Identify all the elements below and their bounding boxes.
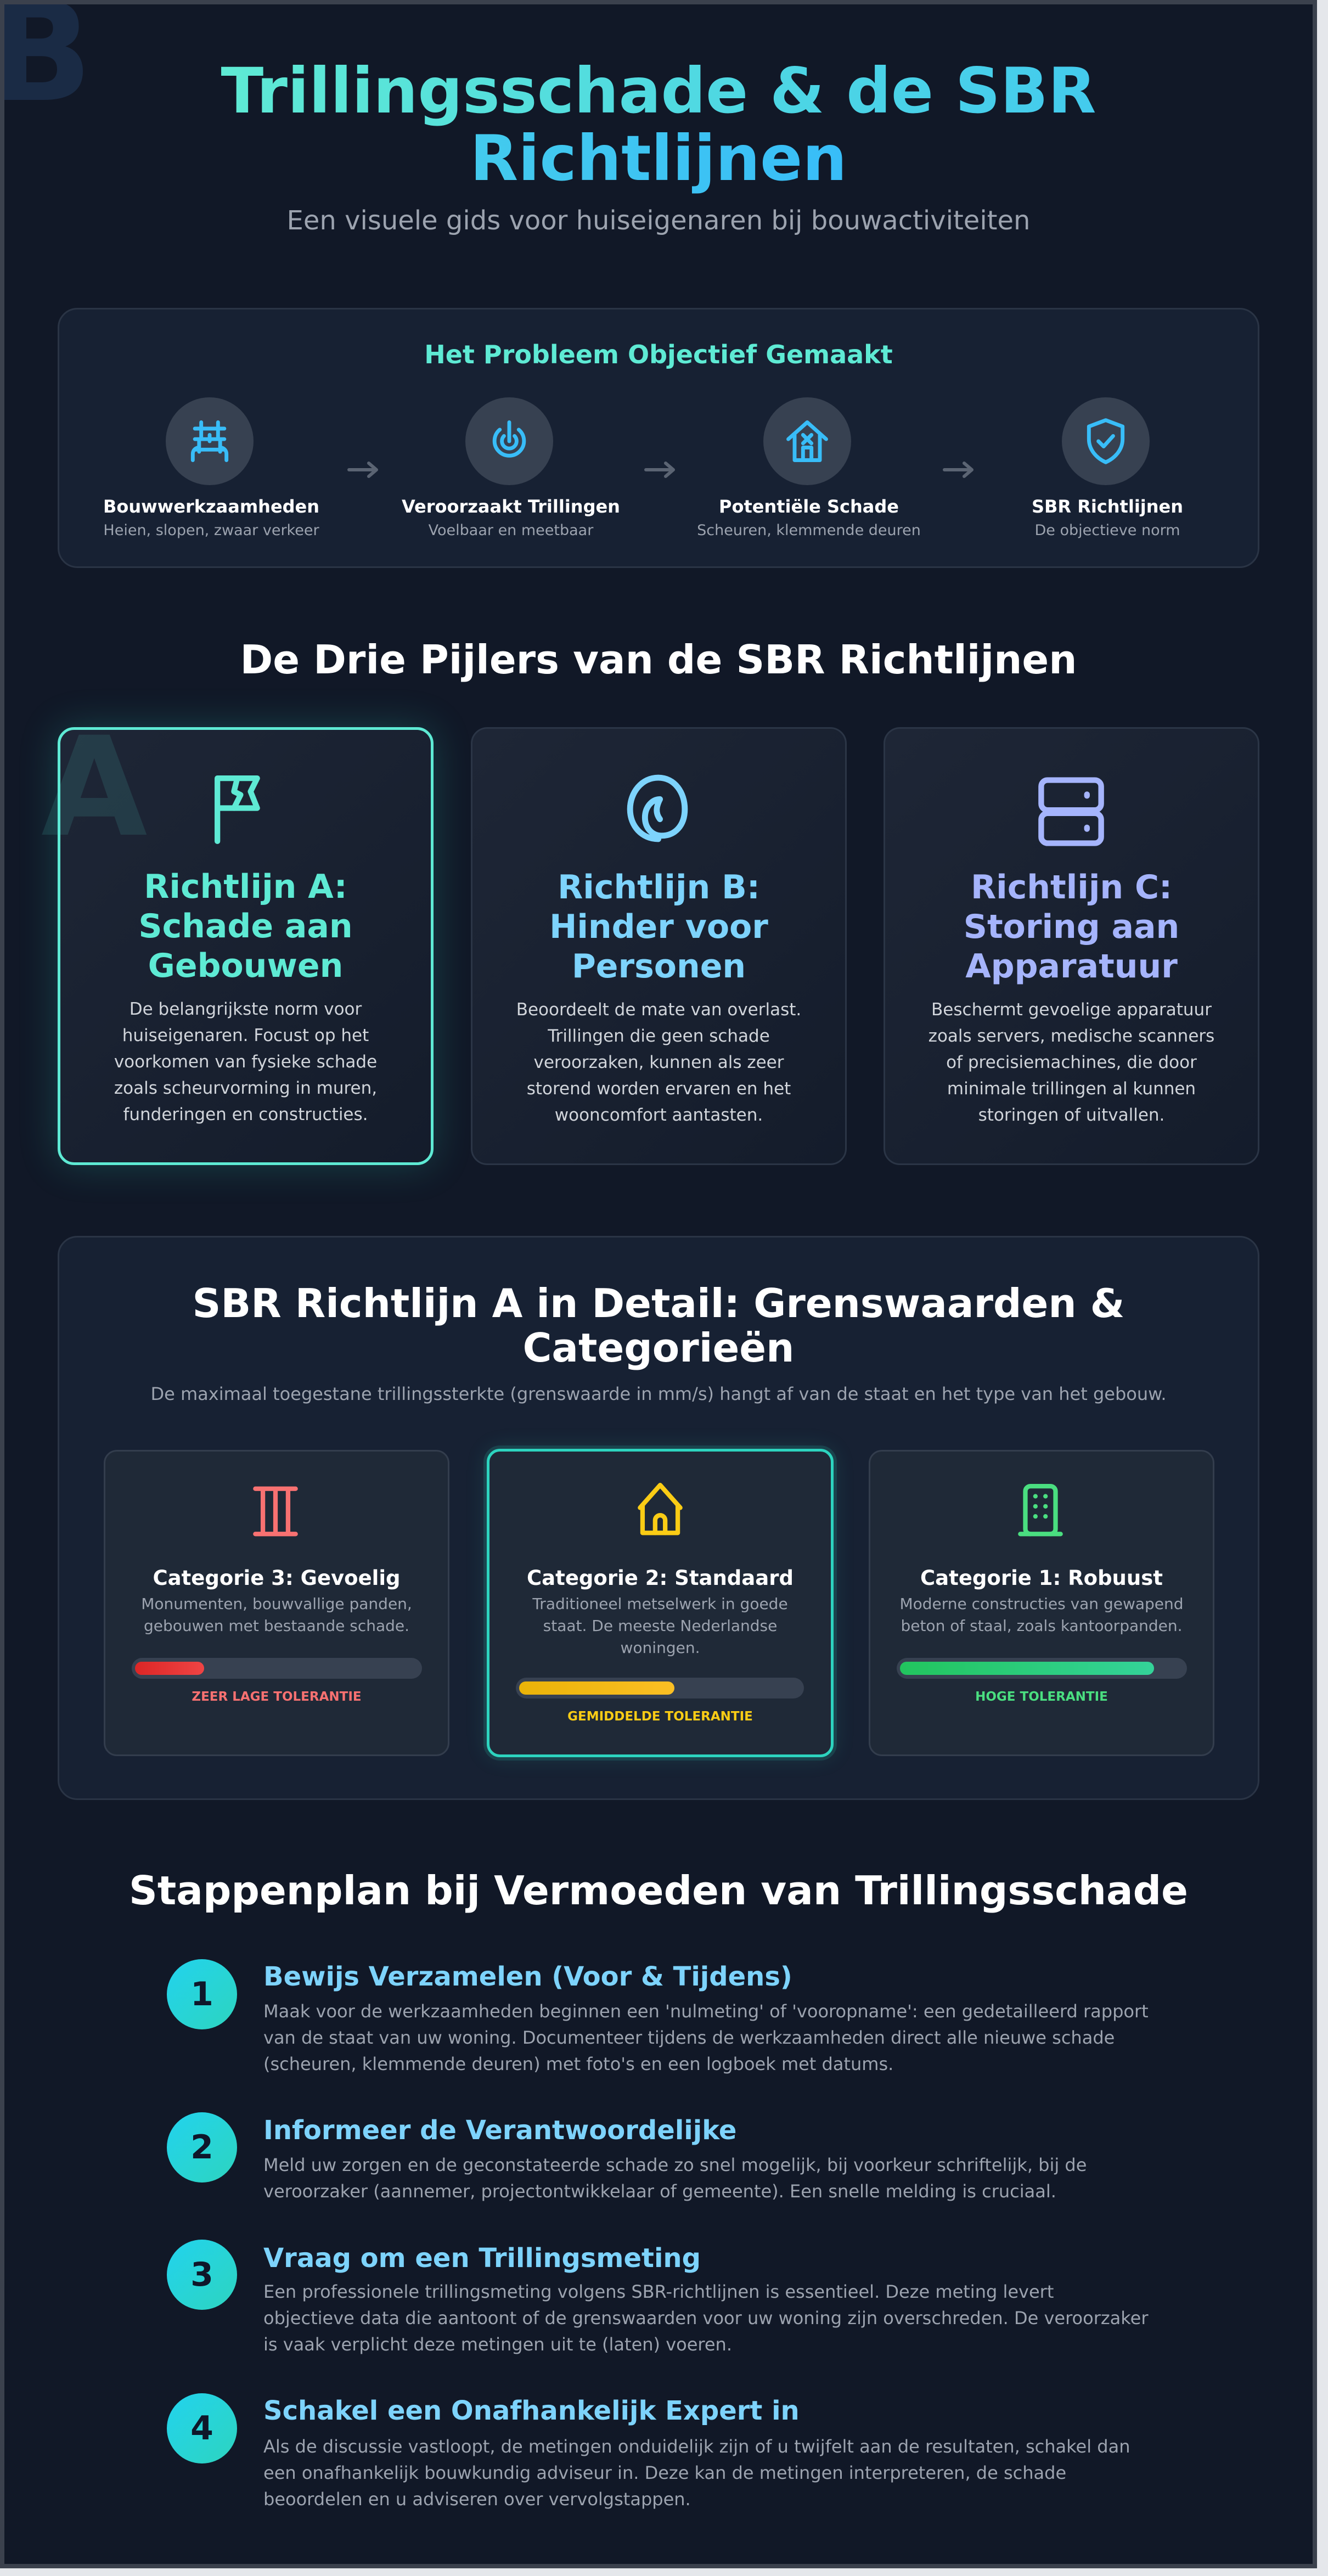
label: Scheuren, klemmende deuren [697, 522, 921, 539]
description: funderingen en constructies. [123, 1105, 368, 1124]
step body: een onafhankelijk bouwkundig adviseur in. Deze kan de metingen interpreteren, de schade [263, 2462, 1066, 2483]
label: Bouwwerkzaamheden [103, 496, 319, 517]
title: Richtlijn C: [971, 868, 1172, 907]
label [402, 496, 620, 539]
title [138, 868, 353, 985]
label [103, 496, 319, 539]
panel heading: Het Probleem Objectief Gemaakt [424, 340, 893, 369]
label: SBR Richtlijnen [1032, 496, 1183, 517]
icon: power [465, 397, 553, 485]
icon: house [630, 1480, 690, 1540]
title: Apparatuur [965, 947, 1178, 986]
description [114, 999, 377, 1124]
bar: hoge tolerantie [897, 1658, 1187, 1679]
heading [193, 1280, 1124, 1371]
title: Schade aan [138, 907, 353, 946]
icon: building [1010, 1481, 1071, 1542]
title [549, 868, 768, 986]
step 2 [167, 2108, 1166, 2207]
step body: is vaak verplicht deze metingen uit te (laten) voeren. [263, 2334, 732, 2355]
step 4 [167, 2389, 1166, 2512]
description: storingen of uitvallen. [978, 1105, 1164, 1125]
icon: house with crack [763, 397, 851, 485]
step body: (scheuren, klemmende deuren) met foto's en een logboek met datums. [263, 2054, 893, 2074]
number circle [167, 2393, 237, 2463]
heading: SBR Richtlijn A in Detail: Grenswaarden & [193, 1280, 1124, 1326]
description: Traditioneel metselwerk in goede [532, 1595, 788, 1613]
description: of precisiemachines, die door [946, 1053, 1197, 1072]
description: Moderne constructies van gewapend [899, 1595, 1184, 1613]
step body: Een professionele trillingsmeting volgens SBR-richtlijnen is essentieel. Deze meting levert [263, 2281, 1054, 2302]
description: Beschermt gevoelige apparatuur [931, 1000, 1212, 1020]
description: voorkomen van fysieke schade [114, 1052, 377, 1072]
title: Richtlijnen [470, 122, 847, 195]
arrow [347, 462, 378, 478]
number circle: 4 [190, 2409, 213, 2448]
step 1 [167, 1955, 1166, 2076]
title: Richtlijn A: [144, 868, 347, 906]
number circle: 2 [190, 2128, 213, 2167]
number circle [167, 2240, 237, 2310]
description: storend worden ervaren en het [527, 1079, 791, 1099]
title: Hinder voor [549, 908, 768, 946]
subtitle: Een visuele gids voor huiseigenaren bij bouwactiviteiten [287, 205, 1030, 236]
description: gebouwen met bestaande schade. [144, 1617, 409, 1635]
title: Categorie 2: Standaard [527, 1566, 794, 1590]
label: Heien, slopen, zwaar verkeer [103, 522, 319, 539]
title [964, 868, 1179, 986]
step title: Informeer de Verantwoordelijke [263, 2115, 736, 2146]
number circle: 1 [190, 1975, 213, 2013]
panel: richtlijn A in detail [58, 1236, 1259, 1800]
title: Richtlijn B: [558, 868, 760, 907]
description: woningen. [621, 1639, 700, 1657]
number circle [167, 2112, 237, 2183]
description [516, 1000, 801, 1125]
category card 3 [104, 1450, 449, 1756]
step body: Maak voor de werkzaamheden beginnen een 'nulmeting' of 'vooropname': een gedetailleerd rapport [263, 2001, 1149, 2022]
step: potentiele schade [697, 397, 921, 539]
description: beton of staal, zoals kantoorpanden. [901, 1617, 1183, 1635]
step body: objectieve data die aantoont of de grenswaarden voor uw woning zijn overschreden. De veroorzaker [263, 2308, 1148, 2328]
description [141, 1595, 412, 1635]
description [489, 1593, 831, 1659]
description: De belangrijkste norm voor [130, 999, 362, 1019]
description: staat. De meeste Nederlandse [543, 1617, 777, 1635]
step body: veroorzaker (aannemer, projectontwikkelaar of gemeente). Een snelle melding is cruciaal. [263, 2181, 1056, 2202]
step 3 [167, 2236, 1166, 2360]
title [221, 54, 1096, 195]
step body [263, 1998, 1149, 2077]
label: HOGE TOLERANTIE [975, 1690, 1108, 1704]
card: richtlijn A [58, 727, 434, 1165]
step body [263, 2279, 1148, 2358]
label: GEMIDDELDE TOLERANTIE [567, 1709, 753, 1724]
step: sbr richtlijnen [1032, 397, 1183, 539]
step title: Vraag om een Trillingsmeting [263, 2243, 701, 2274]
label: ZEER LAGE TOLERANTIE [192, 1690, 362, 1704]
description: huiseigenaren. Focust op het [122, 1026, 369, 1045]
description: zoals scheurvorming in muren, [114, 1078, 377, 1098]
title: Personen [572, 947, 746, 986]
title: Gebouwen [148, 947, 343, 985]
title: Storing aan [964, 908, 1179, 946]
description: Monumenten, bouwvallige panden, [141, 1595, 412, 1613]
description: zoals servers, medische scanners [929, 1026, 1214, 1046]
description: Beoordeelt de mate van overlast. [516, 1000, 801, 1020]
step: veroorzaakt trillingen [402, 397, 620, 539]
ghost letter A: A [41, 707, 147, 867]
number circle: 3 [190, 2256, 213, 2294]
card: richtlijn B [471, 727, 847, 1165]
step body [263, 2152, 1087, 2204]
step: bouwwerkzaamheden [103, 397, 319, 539]
title: Trillingsschade & de SBR [221, 54, 1096, 127]
step body: Als de discussie vastloopt, de metingen onduidelijk zijn of u twijfelt aan de resultaten, schakel dan [263, 2436, 1130, 2457]
icon: spiral [627, 775, 688, 842]
description: Trillingen die geen schade [548, 1026, 770, 1046]
step body: beoordelen en u adviseren over vervolgstappen. [263, 2489, 691, 2510]
bar: gemiddelde tolerantie [516, 1678, 804, 1698]
label: De objectieve norm [1034, 522, 1180, 539]
number circle [167, 1959, 237, 2029]
step body [263, 2433, 1130, 2512]
step title: Schakel een Onafhankelijk Expert in [263, 2395, 800, 2426]
description [870, 1593, 1213, 1637]
icon: construction [166, 397, 254, 485]
label: Potentiële Schade [719, 496, 899, 517]
card: richtlijn C [884, 727, 1259, 1165]
heading: Categorieën [523, 1325, 794, 1371]
heading: stappenplan: Stappenplan bij Vermoeden van Trillingsschade [129, 1868, 1188, 1914]
subtitle: De maximaal toegestane trillingssterkte (grenswaarde in mm/s) hangt af van de staat en het type van het gebouw. [150, 1383, 1167, 1404]
description: minimale trillingen al kunnen [947, 1079, 1196, 1099]
icon: shield check [1062, 397, 1150, 485]
heading: de drie pijlers: De Drie Pijlers van de SBR Richtlijnen [240, 637, 1077, 683]
label: Veroorzaakt Trillingen [402, 496, 620, 517]
arrow [644, 462, 675, 478]
bar: zeer lage tolerantie [132, 1658, 422, 1679]
panel: het probleem objectief gemaakt [58, 308, 1259, 568]
description: wooncomfort aantasten. [555, 1105, 763, 1125]
step title: Bewijs Verzamelen (Voor & Tijdens) [263, 1961, 792, 1992]
step body: van de staat van uw woning. Documenteer tijdens de werkzaamheden direct alle nieuwe schade [263, 2027, 1115, 2048]
icon: server [1038, 777, 1104, 846]
title: Categorie 1: Robuust [920, 1566, 1163, 1590]
description: veroorzaken, kunnen als zeer [533, 1053, 784, 1072]
label [697, 496, 921, 539]
title: Categorie 3: Gevoelig [153, 1566, 401, 1590]
label [1032, 496, 1183, 539]
step body: Meld uw zorgen en de geconstateerde schade zo snel mogelijk, bij voorkeur schriftelijk, bij de [263, 2155, 1087, 2175]
label: Voelbaar en meetbaar [429, 522, 593, 539]
description [929, 1000, 1214, 1125]
arrow [943, 462, 974, 478]
category card 2 [487, 1449, 834, 1757]
category card 1 [869, 1450, 1214, 1756]
icon: columns [253, 1486, 298, 1537]
icon: flag crack [215, 775, 260, 844]
